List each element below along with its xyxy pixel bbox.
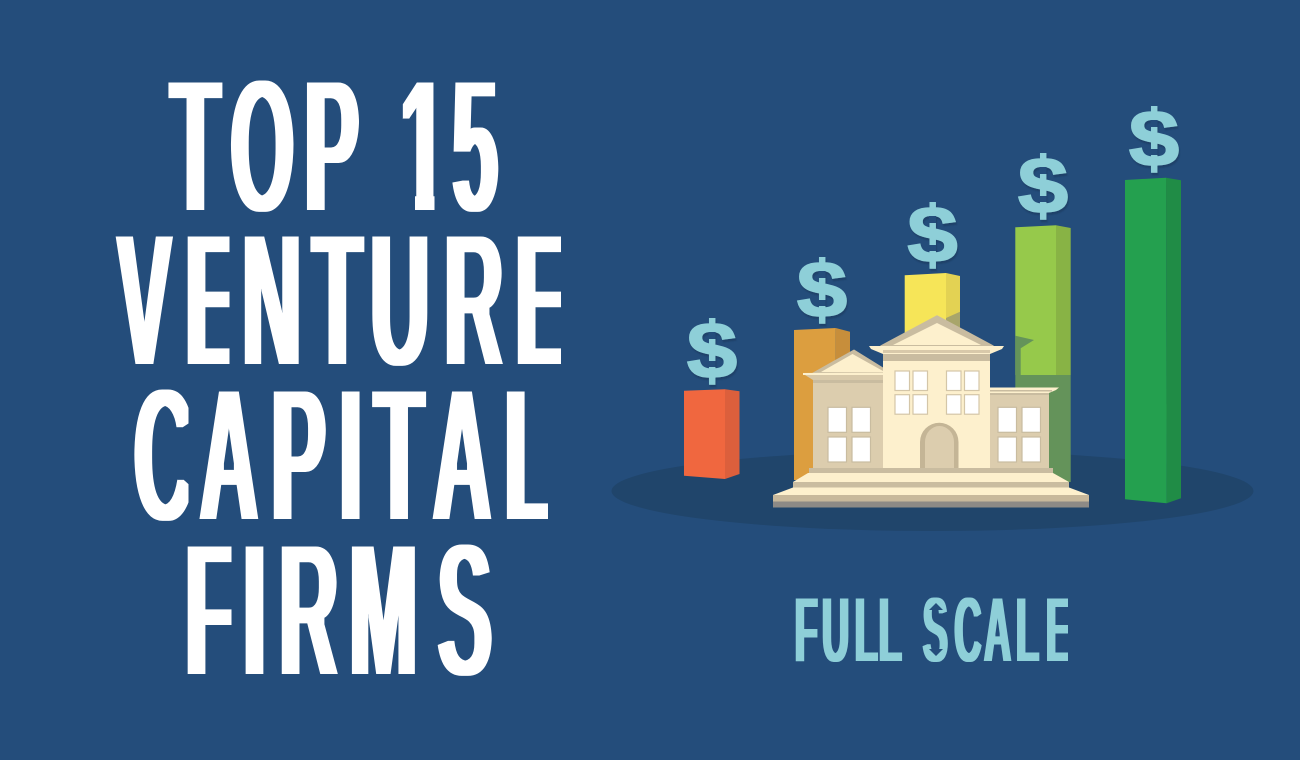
logo wordmark: FULL SCALE [795,578,1071,683]
bar: red [684,389,740,479]
dollar signs [687,94,1179,396]
title line: TOP 15: TOP 15 [171,37,498,255]
bar: yellow [905,273,960,340]
trim of final letter [1068,595,1080,665]
icon: up arrow in S [929,603,943,619]
dollar: orange bar: $ [797,245,847,335]
cornice [869,346,1004,354]
pediment [881,316,993,346]
steps [773,468,1089,508]
logo: Full Scale [795,578,1080,683]
left wing [803,350,883,468]
dollar: yellow bar: $ [907,190,958,280]
centre block [869,316,1004,468]
dollar: dark green bar: $ [1129,94,1179,184]
ground shadow ellipse [612,451,1254,531]
door [920,423,958,468]
right wing [990,388,1059,468]
dollar: red bar: $ [687,306,737,396]
right wing windows [998,407,1040,462]
icon: bank building [773,316,1089,508]
dollar: light green bar: $ [1018,141,1068,231]
bar: light green [1015,225,1071,482]
left wing windows [828,407,870,462]
bar: orange [794,328,850,480]
bar: dark green [1125,178,1181,503]
centre windows [895,371,979,414]
title line: FIRMS: FIRMS [185,501,492,719]
icon: down arrow in S [929,641,943,656]
flag shadow [1015,336,1034,375]
title line: CAPITAL: CAPITAL [134,346,554,564]
title line: VENTURE: VENTURE [117,191,570,409]
title [117,37,581,719]
